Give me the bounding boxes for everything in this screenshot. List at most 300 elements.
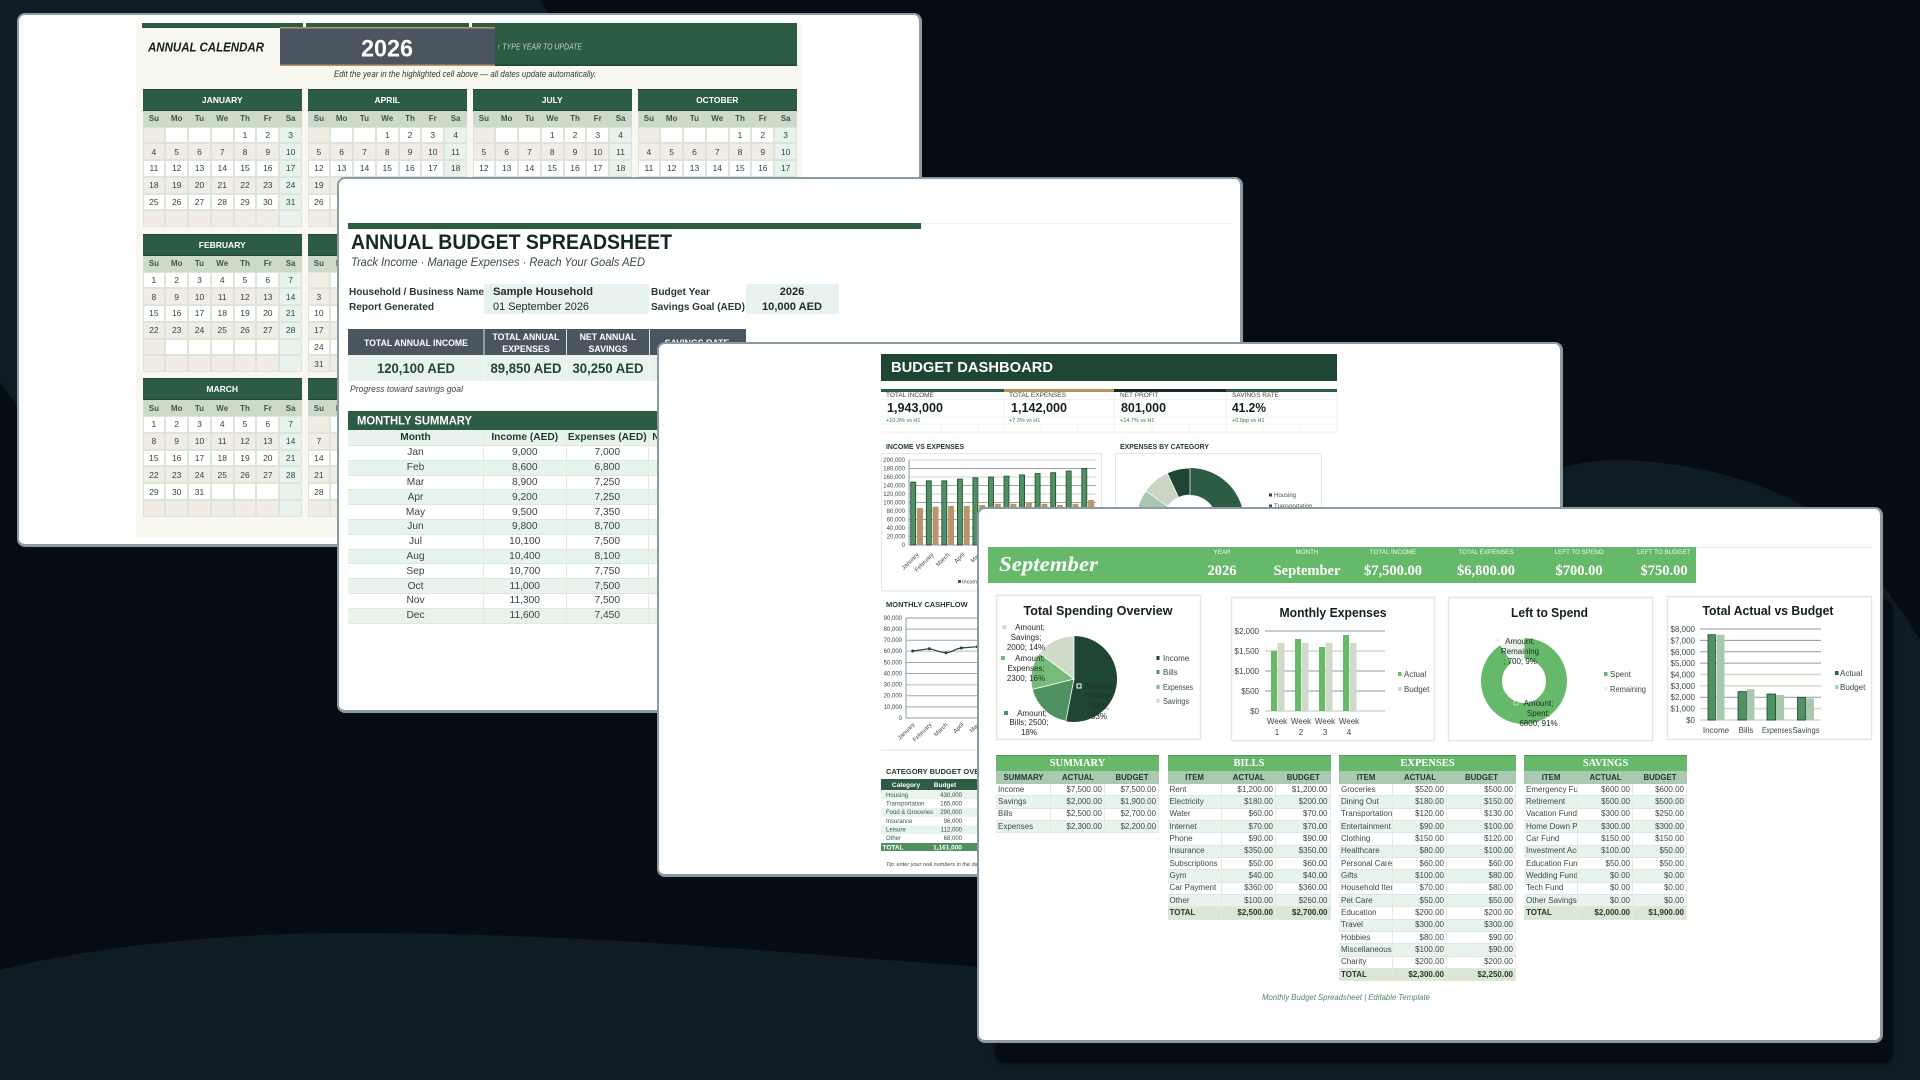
calendar month: March: 4 (220, 419, 225, 429)
table: expenses: $100.00 (1415, 945, 1444, 954)
calendar header: ANNUAL CALENDAR (147, 40, 265, 54)
calendar month: February: Su (149, 259, 159, 268)
chart: total actual vs budget: $7,000 (1671, 636, 1696, 646)
monthly summary table: Income (AED) (491, 432, 558, 443)
calendar month: July: 13 (502, 163, 511, 173)
calendar month: June: 13 (451, 436, 460, 446)
table: category budget overview: 96,000 (944, 819, 963, 825)
calendar month: June: 6 (453, 419, 458, 429)
table: expenses: $200.00 (1484, 957, 1513, 966)
panel: monthly budget spreadsheet (977, 507, 1883, 1043)
chart: total spending overview pie: 53% (1091, 712, 1107, 721)
calendar month: July: 10 (593, 147, 603, 157)
table: category budget overview: Transportation (886, 802, 924, 808)
budget sheet header and KPIs: 89,850 AED (490, 360, 562, 376)
calendar month: March: 28 (286, 470, 295, 480)
calendar month: June: 8 (339, 436, 344, 446)
calendar month: May: Th (405, 259, 415, 268)
calendar month: June: 3 (385, 419, 390, 429)
monthly summary table: 9,500 (512, 507, 538, 518)
calendar month: April: Mo (336, 114, 347, 123)
table: savings: Other Savings (1526, 896, 1577, 905)
calendar month: January: Sa (286, 114, 295, 123)
calendar month: May: 23 (451, 325, 460, 335)
chart: monthly cashflow: 0 (899, 716, 903, 722)
chart: expenses by category (1116, 442, 1322, 590)
chart: monthly expenses: $1,000 (1235, 667, 1260, 676)
calendar month: May: 19 (360, 325, 369, 335)
table: savings: Wedding Fund (1526, 871, 1578, 880)
table: expenses: ITEM (1357, 772, 1375, 782)
chart: left to spend donut: Left to Spend (1511, 605, 1588, 620)
calendar month: April: 13 (337, 163, 346, 173)
calendar month: March: Su (149, 404, 159, 412)
chart: monthly expenses: Actual (1404, 670, 1426, 679)
chart: monthly cashflow: March (933, 722, 949, 738)
month banner: $750.00 (1640, 563, 1688, 579)
monthly summary table: 10,700 (509, 566, 540, 577)
table: bills: $260.00 (1299, 896, 1328, 905)
calendar month: June: 30 (360, 487, 369, 497)
table: savings: $300.00 (1601, 822, 1630, 831)
calendar month: February: 25 (218, 325, 227, 335)
calendar month: February: Th (240, 259, 250, 268)
table: expenses: ACTUAL (1404, 772, 1436, 782)
table: summary: Income (998, 785, 1024, 794)
calendar month: June: 4 (408, 419, 412, 429)
calendar month: October: 12 (667, 163, 676, 173)
monthly summary table: 7,500 (594, 595, 620, 606)
monthly summary table: Feb (407, 462, 424, 473)
calendar month: March: Th (240, 404, 250, 412)
table: category budget overview: Category (892, 782, 920, 789)
calendar month: February: Fr (264, 259, 272, 268)
calendar month: October: 17 (781, 163, 790, 173)
chart: monthly cashflow: 30,000 (884, 682, 903, 688)
calendar month: October: Sa (781, 114, 790, 123)
calendar month: February: Sa (286, 259, 295, 268)
monthly summary table: Nov (406, 595, 425, 606)
calendar month: April: APRIL (374, 94, 400, 104)
table: savings: $300.00 (1655, 822, 1684, 831)
chart: total actual vs budget: Income (1703, 726, 1730, 735)
calendar month: July: 11 (616, 147, 625, 157)
table: bills: Rent (1170, 785, 1186, 794)
calendar month: July: 8 (550, 147, 555, 157)
table: expenses: $150.00 (1415, 834, 1444, 843)
calendar month: January: 8 (243, 147, 247, 157)
calendar month: February: 14 (286, 292, 295, 302)
calendar month: June: 27 (451, 470, 460, 480)
calendar month: April: 17 (428, 163, 438, 173)
table: bills: $100.00 (1244, 896, 1273, 905)
calendar month: July: We (546, 114, 558, 123)
chart: monthly cashflow: 50,000 (884, 660, 903, 666)
calendar month: June: 12 (428, 436, 438, 446)
calendar month: January: 17 (286, 163, 295, 173)
table: expenses: $130.00 (1484, 809, 1513, 818)
calendar month: October (638, 89, 797, 177)
table: bills: $60.00 (1249, 809, 1273, 818)
calendar month: March: 26 (240, 470, 250, 480)
chart: total spending overview pie: Amount; (1015, 654, 1045, 663)
chart: total spending overview pie: Income; (1085, 691, 1113, 700)
table: category budget overview: 1,161,000 (933, 844, 962, 852)
calendar month: May: 31 (314, 359, 324, 369)
calendar month: February: 28 (286, 325, 295, 335)
calendar month: May: Su (314, 259, 324, 268)
chart: total spending overview pie: Expenses; (1007, 664, 1045, 673)
table: bills: Water (1170, 809, 1191, 818)
calendar month: March: 27 (263, 470, 273, 480)
calendar month: April: 14 (360, 163, 369, 173)
calendar month: January: Mo (171, 114, 182, 123)
calendar month: February: 1 (152, 275, 156, 285)
month banner: $7,500.00 (1364, 563, 1422, 579)
panel: annual calendar sheet (17, 13, 922, 547)
chart: monthly cashflow: 20,000 (884, 694, 903, 700)
chart: income vs expenses: February (914, 552, 935, 573)
table: bills: $70.00 (1303, 822, 1328, 831)
chart: monthly expenses: $0 (1250, 707, 1260, 716)
calendar month: January: 15 (240, 163, 250, 173)
calendar month: April: 3 (430, 130, 435, 140)
calendar month: January: 6 (197, 147, 202, 157)
table: summary: Savings (998, 797, 1026, 806)
calendar month: March: 1 (152, 419, 156, 429)
calendar month: May: 14 (405, 308, 415, 318)
table: expenses: $100.00 (1484, 822, 1513, 831)
table: bills: Other (1170, 896, 1190, 905)
footer note: Monthly Budget Spreadsheet | Editable Template (1262, 993, 1431, 1002)
table: bills: $40.00 (1303, 871, 1328, 880)
monthly summary table: 11,600 (510, 610, 540, 621)
calendar month: May: 13 (382, 308, 392, 318)
table: savings: $300.00 (1601, 809, 1630, 818)
table: expenses: $80.00 (1420, 933, 1444, 942)
calendar month: May: 11 (337, 308, 346, 318)
table: bills: ITEM (1185, 772, 1204, 782)
monthly summary table: 7,500 (594, 581, 620, 592)
table: category budget overview: 290,000 (940, 810, 963, 816)
budget sheet header and KPIs: ANNUAL BUDGET SPREADSHEET (351, 231, 672, 254)
monthly summary table: 8,700 (594, 521, 620, 532)
calendar month: April: We (381, 114, 393, 123)
table: expenses: Hobbies (1341, 933, 1370, 942)
table: expenses: $80.00 (1489, 871, 1513, 880)
budget sheet header and KPIs: Budget Year (651, 286, 710, 298)
calendar month: June (308, 378, 460, 517)
calendar month: July: 18 (616, 163, 625, 173)
chart: income vs expenses: 40,000 (887, 526, 906, 532)
monthly summary table: 6,800 (594, 462, 620, 473)
table: expenses: $60.00 (1489, 859, 1513, 868)
window shadow (996, 600, 1892, 1063)
table: bills: $1,200.00 (1292, 785, 1328, 794)
chart: total actual vs budget (1668, 596, 1872, 740)
budget sheet header and KPIs: NET ANNUAL (580, 332, 637, 342)
table: expenses: $60.00 (1420, 859, 1444, 868)
chart: total actual vs budget: $3,000 (1671, 682, 1696, 691)
chart: income vs expenses: 100,000 (883, 500, 906, 506)
table: category budget overview: 430,000 (940, 793, 963, 799)
calendar month: July: Tu (525, 114, 534, 123)
monthly summary table: Dec (406, 610, 425, 621)
chart: total spending overview pie: Savings; (1011, 633, 1041, 642)
calendar month: October: 10 (781, 147, 790, 157)
calendar month: May: 22 (428, 325, 438, 335)
table: category budget overview: CATEGORY BUDGET OVERVIEW (886, 767, 1005, 776)
KPI row: SAVINGS RATE (1232, 392, 1280, 399)
calendar month: May: 1 (430, 275, 435, 285)
table: category budget overview: Insurance (886, 819, 913, 825)
table: bills: Electricity (1170, 797, 1204, 806)
table: savings: $2,000.00 (1594, 908, 1630, 917)
chart: income vs expenses: April (954, 552, 966, 565)
calendar month: February: 7 (288, 275, 293, 285)
calendar month: February: 8 (152, 292, 156, 302)
calendar month: May: 27 (382, 342, 392, 352)
calendar month: June: Su (314, 404, 324, 412)
budget sheet header and KPIs: TOTAL ANNUAL INCOME (364, 338, 468, 348)
table: savings: Car Fund (1526, 834, 1559, 843)
calendar month: May: 18 (337, 325, 346, 335)
chart: total actual vs budget: Budget (1840, 683, 1866, 692)
monthly summary table: 7,250 (594, 492, 620, 503)
table: category budget overview: 165,000 (940, 802, 963, 808)
chart: total actual vs budget: Total Actual vs Budget (1702, 603, 1834, 618)
calendar month: July: Th (570, 114, 580, 123)
calendar month: July: 9 (573, 147, 577, 157)
calendar month: January: 28 (218, 197, 227, 207)
calendar month: May: 21 (405, 325, 415, 335)
chart: total actual vs budget: $1,000 (1671, 704, 1696, 714)
calendar month: June: 28 (314, 487, 324, 497)
calendar month: May: 12 (360, 308, 369, 318)
table: expenses: Groceries (1341, 785, 1376, 794)
table: savings: $100.00 (1601, 846, 1630, 855)
calendar month: April (308, 89, 467, 227)
table: savings (1524, 755, 1687, 920)
calendar month: February: 2 (174, 275, 179, 285)
chart: monthly cashflow: 90,000 (884, 616, 903, 622)
table: expenses: Travel (1341, 920, 1363, 929)
calendar month: October: 3 (783, 130, 788, 140)
chart: total actual vs budget: Savings (1792, 726, 1820, 735)
month banner: LEFT TO SPEND (1554, 549, 1604, 556)
table: expenses: Gifts (1341, 871, 1357, 880)
calendar month: June: 26 (428, 470, 438, 480)
table: expenses: $300.00 (1415, 920, 1444, 929)
table: expenses: $520.00 (1415, 785, 1444, 794)
monthly summary table: 8,900 (512, 477, 538, 488)
calendar month: October: 6 (692, 147, 697, 157)
calendar month: March: Sa (286, 404, 295, 412)
calendar month: June: 10 (382, 436, 392, 446)
KPI row: TOTAL EXPENSES (1009, 392, 1067, 399)
table: category budget overview: Other (886, 836, 901, 842)
KPI row: 801,000 (1121, 400, 1166, 415)
calendar month: January: 19 (172, 180, 181, 190)
calendar month: February: 24 (195, 325, 204, 335)
calendar month: February: 20 (263, 308, 273, 318)
table: expenses: Dining Out (1341, 797, 1379, 806)
calendar month: January: 24 (286, 180, 295, 190)
calendar month: July: JULY (542, 94, 563, 104)
calendar month: October: 9 (760, 147, 765, 157)
chart: left to spend donut: Amount; (1524, 699, 1553, 708)
chart: total spending overview pie: Amount; (1084, 682, 1114, 691)
calendar month: May: Mo (336, 259, 347, 268)
table: bills: $50.00 (1249, 859, 1273, 868)
monthly summary table: Expenses (AED) (568, 432, 647, 443)
calendar month: May: 26 (360, 342, 369, 352)
table: expenses: Pet Care (1341, 896, 1373, 905)
monthly summary table: Oct (408, 581, 423, 592)
calendar month: June: 24 (382, 470, 392, 480)
calendar month: March: 3 (197, 419, 202, 429)
table: expenses: Miscellaneous (1341, 945, 1392, 954)
chart: monthly expenses: $1,500 (1235, 647, 1260, 656)
KPI row: 1,943,000 (887, 400, 943, 415)
table: category budget overview: Housing (886, 793, 908, 799)
calendar month: March: 29 (149, 487, 159, 497)
table: category budget overview: TOTAL (882, 844, 904, 852)
chart: monthly expenses: Week (1339, 717, 1360, 726)
chart: total actual vs budget: Actual (1840, 669, 1862, 678)
table: expenses: $120.00 (1415, 809, 1444, 818)
monthly summary table: Jun (407, 521, 424, 532)
calendar month: June: Fr (429, 404, 437, 412)
chart: total spending overview pie: Income (1163, 654, 1190, 663)
table: bills: $360.00 (1299, 883, 1328, 892)
chart: monthly cashflow: 10,000 (884, 705, 903, 711)
calendar month: April: 5 (317, 147, 321, 157)
calendar month: June: Tu (360, 404, 369, 412)
table: summary: Bills (998, 809, 1013, 818)
monthly summary table: 9,200 (512, 492, 538, 503)
chart: income vs expenses: 60,000 (887, 518, 906, 524)
chart: total spending overview pie: 2300; 16% (1007, 674, 1045, 683)
table: expenses: $200.00 (1484, 908, 1513, 917)
calendar month: January: 10 (286, 147, 295, 157)
tip note: Tip: enter your real numbers in the data sheet (886, 862, 998, 868)
table: bills: $70.00 (1249, 822, 1273, 831)
chart: total actual vs budget: $8,000 (1671, 625, 1696, 634)
budget sheet header and KPIs: 30,250 AED (572, 360, 644, 376)
chart: total spending overview pie: Bills (1163, 668, 1178, 677)
chart: income vs expenses: 80,000 (887, 509, 906, 515)
monthly summary table: 7,750 (594, 566, 620, 577)
table: savings: $50.00 (1660, 846, 1684, 855)
table: expenses: Entertainment (1341, 822, 1391, 831)
table: category budget overview: Budget (934, 782, 957, 789)
table: expenses: $150.00 (1484, 797, 1513, 806)
chart: income vs expenses: 180,000 (883, 466, 906, 472)
monthly summary table: 11,000 (510, 581, 540, 592)
table: savings: SAVINGS (1583, 758, 1628, 769)
KPI row (881, 389, 1337, 432)
calendar month: May: 16 (451, 308, 460, 318)
budget sheet header and KPIs: Savings Goal (AED) (651, 301, 745, 313)
table: bills: $2,700.00 (1292, 908, 1328, 917)
calendar month: April: 15 (382, 163, 392, 173)
calendar month: January: 14 (218, 163, 227, 173)
chart: income vs expenses: 20,000 (887, 534, 906, 540)
calendar month: October: We (711, 114, 723, 123)
calendar month: May: Sa (451, 259, 460, 268)
calendar month: January (143, 89, 302, 227)
calendar month: April: 27 (337, 197, 346, 207)
chart: total spending overview pie: Savings (1163, 697, 1189, 706)
calendar month: July: Mo (501, 114, 512, 123)
calendar month: June: Mo (336, 404, 347, 412)
table: expenses: $90.00 (1489, 933, 1513, 942)
calendar month: July: 1 (550, 130, 555, 140)
calendar month: April: Fr (429, 114, 437, 123)
calendar month: February: 22 (149, 325, 159, 335)
chart: monthly cashflow: 80,000 (884, 627, 903, 633)
chart: monthly expenses: Week (1291, 717, 1312, 726)
calendar month: April: 30 (405, 197, 415, 207)
calendar month: January: 20 (195, 180, 204, 190)
calendar month: June: Th (405, 404, 415, 412)
chart: total spending overview pie: Total Spending Overview (1024, 603, 1173, 618)
calendar month: June: 2 (362, 419, 367, 429)
calendar month: March: 18 (218, 453, 227, 463)
monthly summary table: Jan (407, 447, 424, 458)
table: savings: $150.00 (1655, 834, 1684, 843)
chart: total spending overview pie: 18% (1021, 728, 1037, 737)
monthly summary table: 8,600 (512, 462, 538, 473)
budget sheet header and KPIs: 01 September 2026 (493, 301, 589, 313)
calendar header: 2026 (361, 36, 413, 62)
KPI row: +7.3% vs H1 (1009, 418, 1040, 424)
calendar month: October: Su (644, 114, 654, 123)
calendar month: June: 20 (451, 453, 460, 463)
calendar month: January: Th (240, 114, 250, 123)
calendar month: January: 5 (174, 147, 179, 157)
table: summary: $7,500.00 (1066, 785, 1102, 794)
calendar month: March: 25 (218, 470, 227, 480)
budget sheet header and KPIs: 2026 (780, 286, 804, 298)
chart: left to spend donut: Spent (1610, 670, 1632, 679)
calendar month: June: 17 (382, 453, 392, 463)
chart: expenses by category: Housing (1274, 493, 1296, 499)
chart: monthly expenses: Monthly Expenses (1280, 605, 1386, 620)
calendar month: February: 3 (197, 275, 202, 285)
calendar month: April: 18 (451, 163, 460, 173)
calendar month: July: 2 (573, 130, 577, 140)
calendar month: April: 24 (428, 180, 438, 190)
monthly summary table: Apr (408, 492, 423, 503)
calendar month: October: 14 (712, 163, 722, 173)
calendar month: July: 4 (618, 130, 623, 140)
table: expenses: $100.00 (1415, 871, 1444, 880)
calendar month: May: We (381, 259, 393, 268)
calendar month: May: 2 (453, 275, 458, 285)
table: savings: ACTUAL (1589, 772, 1622, 782)
calendar month: June: 25 (405, 470, 415, 480)
calendar month: March: 5 (243, 419, 247, 429)
calendar month: May: 20 (382, 325, 392, 335)
budget sheet header and KPIs: MONTHLY SUMMARY (357, 414, 472, 428)
budget sheet header and KPIs: Progress toward savings goal (350, 384, 464, 394)
calendar month: February (143, 234, 302, 372)
calendar month: March: 30 (172, 487, 181, 497)
table: bills: $200.00 (1299, 797, 1328, 806)
table: summary: $2,500.00 (1066, 809, 1102, 818)
